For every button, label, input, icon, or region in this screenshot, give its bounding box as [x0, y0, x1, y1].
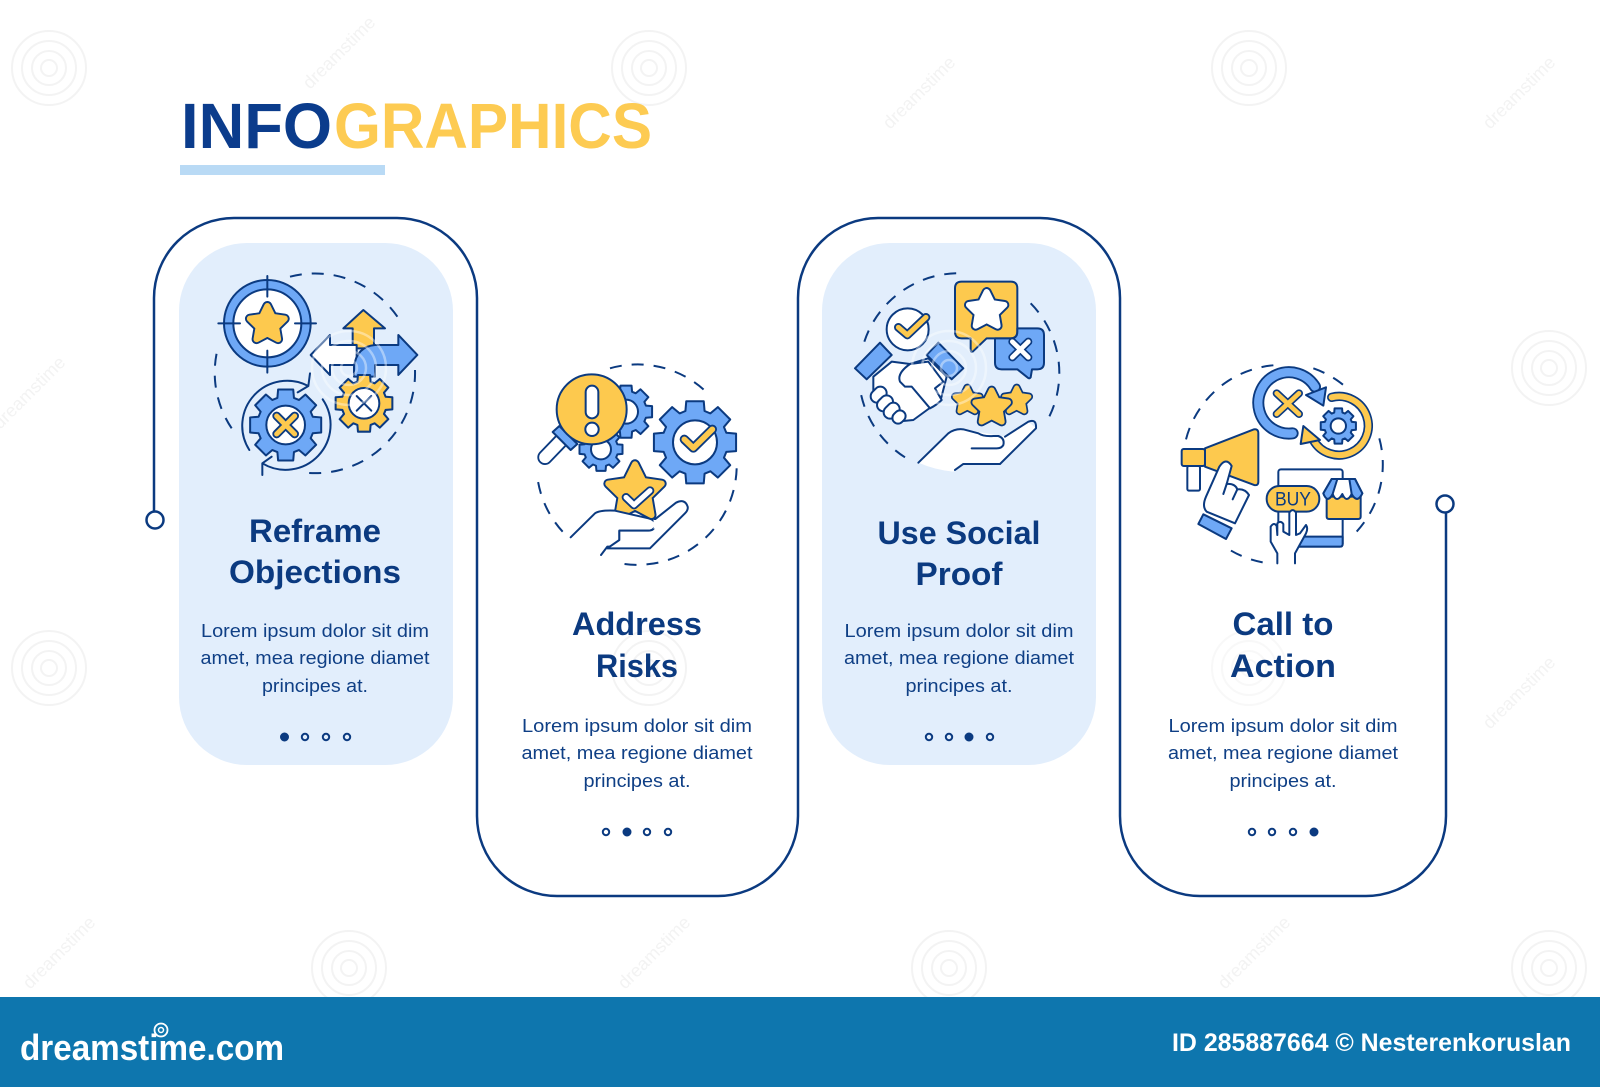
card 4 text: call to action: Action — [1230, 648, 1336, 684]
card 2 text: address risks: Risks — [596, 648, 678, 684]
card 2 text: address risks: Address — [572, 606, 702, 642]
card 2 text: address risks: Lorem ipsum dolor sit dim — [522, 715, 752, 736]
watermark pattern: dreamstime — [19, 912, 99, 993]
watermark pattern: dreamstime — [299, 12, 379, 93]
card 1 text: reframe objections — [200, 513, 430, 696]
title — [181, 90, 652, 162]
card 3 text: use social proof — [844, 515, 1074, 696]
icon: call to action — [1182, 365, 1383, 563]
watermark pattern: dreamstime — [879, 52, 959, 133]
card 4 text: call to action: amet, mea regione diamet — [1168, 742, 1398, 763]
watermark pattern: dreamstime — [1479, 52, 1559, 133]
footer bar — [0, 997, 1600, 1087]
serpentine outline connecting panels — [154, 218, 1446, 896]
footer logo: dreamstime.com — [20, 1027, 284, 1068]
card 4 text: call to action: Lorem ipsum dolor sit dim — [1168, 715, 1398, 736]
card 1 text: reframe objections: amet, mea regione diamet — [200, 647, 430, 668]
icon: address risks — [538, 364, 737, 565]
card 3 pagination dots — [926, 734, 993, 740]
icon: use social proof — [855, 273, 1059, 472]
card 1 text: reframe objections: Lorem ipsum dolor sit dim — [201, 620, 429, 641]
card 3 text: use social proof: Lorem ipsum dolor sit dim — [844, 620, 1074, 641]
title: GRAPHICS — [334, 90, 652, 162]
watermark pattern: dreamstime — [1214, 912, 1294, 993]
card 4 pagination dots — [1249, 828, 1318, 836]
card 1 text: reframe objections: Objections — [229, 554, 401, 590]
card 4 text: call to action: principes at. — [1230, 770, 1336, 791]
card 3 text: use social proof: Proof — [916, 556, 1003, 592]
icon: call to action: BUY — [1275, 490, 1311, 511]
watermark pattern: dreamstime — [614, 912, 694, 993]
card 1 pagination dots — [281, 734, 350, 740]
card 2 text: address risks — [522, 606, 752, 791]
icon: reframe objections — [215, 273, 417, 475]
card 4 text: call to action: Call to — [1232, 606, 1334, 642]
card 2 text: address risks: principes at. — [584, 770, 690, 791]
end marker — [1436, 496, 1454, 512]
footer image id and credit: ID 285887664 © Nesterenkoruslan — [1172, 1029, 1571, 1057]
card 2 text: address risks: amet, mea regione diamet — [522, 742, 752, 763]
title underline — [180, 165, 385, 175]
watermark overlay on icons — [312, 331, 1286, 705]
card 1 text: reframe objections: principes at. — [262, 675, 368, 696]
panel: reframe objections background — [179, 243, 453, 765]
title: INFO — [181, 90, 332, 162]
card 4 text: call to action — [1168, 606, 1398, 791]
card 3 text: use social proof: amet, mea regione diamet — [844, 647, 1074, 668]
card 1 text: reframe objections: Reframe — [249, 513, 381, 549]
panel: use social proof background — [822, 243, 1096, 765]
card 2 pagination dots — [603, 828, 671, 836]
watermark pattern: dreamstime — [1479, 652, 1559, 733]
card 3 text: use social proof: Use Social — [878, 515, 1040, 551]
start marker — [146, 512, 164, 528]
card 3 text: use social proof: principes at. — [906, 675, 1012, 696]
